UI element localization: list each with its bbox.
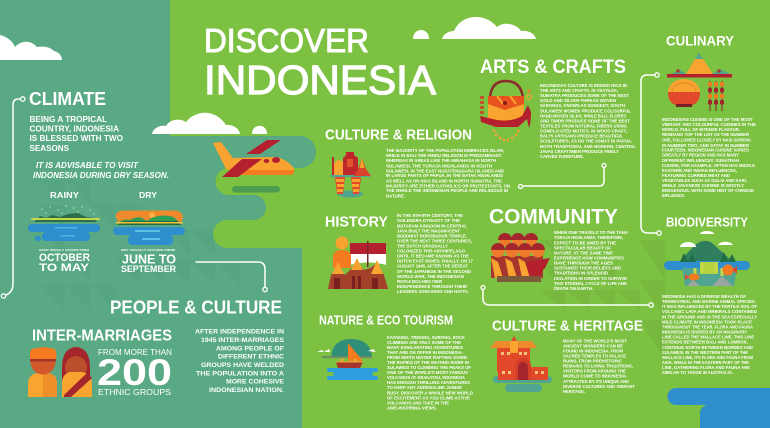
text: heritage body: FOUND IN INDONESIA. FROM xyxy=(563,348,623,354)
icon: couple xyxy=(28,347,92,397)
text: arts body: THE ARTS AND CRAFTS. IN TEXTILES, xyxy=(540,88,619,94)
text: arts body: JAVAS CRAFTSMEN PRODUCE FINELY xyxy=(540,149,620,155)
text: history body: SAILENDRA DYNASTY OF THE xyxy=(397,218,461,224)
text: culture and religion body: THE WHOLE THE INDONESIAN PEOPLE ARE RELIGIOUS IN xyxy=(386,188,508,194)
text: heritage body: SACRED TEMPLES TO PALACE xyxy=(563,354,627,360)
connector: arts to community xyxy=(518,164,606,188)
text: people and culture body: 1945 INTER-MARRIAGES xyxy=(201,337,285,344)
text: culture and religion body: WHILE IN BALI THE HINDU RELIGION IS PREDOMINANT. xyxy=(386,153,502,159)
text: arts body: TEXTILES FROM NATURAL FIBERS USING xyxy=(540,124,627,130)
text: heritage body xyxy=(563,338,635,395)
text: heritage body: REMAINS TO LIVING TRADITIONS, xyxy=(563,364,634,370)
shape: blue water corner xyxy=(668,388,770,428)
icon: dry landscape xyxy=(113,210,185,245)
cloud: top centre xyxy=(413,17,536,39)
icon: bag and shoe xyxy=(480,81,532,141)
icon: boat xyxy=(317,339,378,380)
text: culinary body: VIBRANT AND COLOURFUL CUISINES IN THE xyxy=(662,122,757,128)
text: biodiversity body: INDONESIA IS DIVIDED BY AN IMAGINARY xyxy=(662,330,748,336)
text: heritage body: HERITAGE. xyxy=(563,389,585,395)
text: climate intro: COUNTRY, INDONESIA xyxy=(30,124,119,134)
text: heritage body: MANY OF THE WORLD'S MOST xyxy=(563,338,627,344)
text: history body: COLONIZED THIS ARCHIPELAGO xyxy=(397,248,465,254)
text: biodiversity body: EXTENDS BETWEEN BALI AND LOMBOK, xyxy=(662,340,749,346)
text: nature body: SULAWESI TO CLIMBING THE PEAKS OF xyxy=(387,365,471,371)
text: biodiversity body: LINE CALLED THE WALLACE LINE. THIS LINE xyxy=(662,334,755,340)
text: arts body: GOLD AND SILVER-THREAD WOVEN xyxy=(540,98,616,104)
text: history body: JAVA BUILT THE MAGNIFICENT xyxy=(397,228,460,234)
text: nature body: MANY EXHILARATING ADVENTURES xyxy=(387,345,464,351)
heading: community: COMMUNITY xyxy=(489,206,618,228)
text: biodiversity body: VOLCANIC LAVA AND MINERALS CONTAINED xyxy=(662,309,757,315)
text: nature body: HAS ENOUGH THRILLING ADVENTURES xyxy=(387,380,471,386)
text: history body: IN THE 8TH-9TH CENTURY, THE xyxy=(397,213,464,219)
heading: culture and heritage: CULTURE & HERITAGE xyxy=(492,318,643,334)
text: heritage body: ANCIENT WONDERS CAN BE xyxy=(563,344,624,350)
text: community body: EXPECT TO BE AWED BY THE xyxy=(554,240,617,246)
heading: culture and religion: CULTURE & RELIGION xyxy=(325,126,472,144)
text: nature body: TO KEEP ANY ADRENALINE JUNKIE xyxy=(387,385,463,391)
text: culture and religion body: WHEREAS IN AREAS LIKE THE MINAHASA IN NORTH xyxy=(386,158,496,164)
text: arts body: SARONGS, KNOWN AS SONGKET; SOUTH xyxy=(540,103,625,109)
text: culinary body: INDIGENOUS, WITH SOME HINT OF CHINESE xyxy=(662,188,755,194)
background: green panel xyxy=(170,0,770,428)
text: culture and religion body: IN LARGE PARTS OF PAPUA, IN THE BATAK HIGHLANDS xyxy=(386,173,504,179)
text: rainy dates: RAINY USUALLY OCCURS FROM xyxy=(39,248,90,252)
text: people and culture body: THE POPULATION INTO A xyxy=(196,370,284,378)
text: culinary body xyxy=(662,117,757,199)
text: community body: EXPERIENCE HOW COMMUNITIES xyxy=(554,256,625,262)
text: culture and religion body: MAJORITY ARE EITHER CATHOLICS OR PROTESTANTS, ON xyxy=(386,184,510,190)
icon: community people xyxy=(491,233,550,282)
text: community body: NATURE. AT THE SAME TIME xyxy=(554,250,614,256)
text: nature body: OF EXCITEMENT AS YOU CLIMB ACTIVE xyxy=(387,396,471,402)
title xyxy=(204,22,437,103)
text: biodiversity body: SULAWESI. IN THE WESTERN PART OF THE xyxy=(662,350,749,356)
text: climate advice: INDONESIA DURING DRY SEASON. xyxy=(33,171,169,180)
text: arts body: CARVED FURNITURE. xyxy=(540,154,584,160)
heading: inter-marriages: INTER-MARRIAGES xyxy=(32,328,172,344)
text: rainy dates: TO MAY xyxy=(39,262,90,274)
text: climate intro: BEING A TROPICAL xyxy=(30,115,107,124)
text: history body xyxy=(397,213,473,295)
text: history body: OF THE JAPANESE IN THE SECOND xyxy=(397,269,471,275)
text: culture and religion body: SULAWESI, THE TORAJA HIGHLANDS IN SOUTH xyxy=(386,164,493,170)
text: arts body: AND TIMOR PRODUCE SOME OF THE BEST xyxy=(540,118,630,124)
text: biodiversity body xyxy=(662,294,758,376)
text: nature body: AWE-INSPIRING VIEWS. xyxy=(387,406,437,412)
text: heritage body: RUINS, FROM PREHISTORIC xyxy=(563,358,622,364)
text: rainy dates xyxy=(39,248,90,274)
text: biodiversity body: CONTINUE NORTH BETWEEN BORNEO AND xyxy=(662,345,753,351)
text: community body: DEATH ON EARTH. xyxy=(554,286,593,292)
text: culinary body: IN NUMBER TWO, AND SATAY IN NUMBER xyxy=(662,143,749,149)
text: biodiversity body: WALLACE LINE, ITS FLORA AND FAUNA FROM xyxy=(662,355,753,361)
text: nature body: THAT ARE ON OFFER IN INDONESIA. xyxy=(387,350,463,356)
text: history body: AUGUST 1945, AFTER THE DEFEAT xyxy=(397,264,468,270)
title: INDONESIA xyxy=(204,57,437,103)
text: climate advice xyxy=(33,161,169,180)
text: culture and religion body: SULAWESI, IN THE EAST NUSATENGGARA ISLANDS AND xyxy=(386,168,504,174)
text: arts body: HAND-WOVEN SILKS; WHILE BALI, FLORES xyxy=(540,114,627,120)
text: history body: DUTCH EAST INDIES. FINALLY, ON 17 xyxy=(397,258,473,264)
text: history body: THE DUTCH GRADUALLY xyxy=(397,244,449,250)
text: biodiversity body: TERRESTRIAL AND MARINE ANIMAL SPECIES. xyxy=(662,299,756,305)
text: people and culture body: AMONG PEOPLE OF xyxy=(216,346,284,352)
heading: culinary: CULINARY xyxy=(666,32,735,48)
text: biodiversity body: THROUGHOUT THE YEAR. FLORA AND FAUNA xyxy=(662,324,753,330)
text: dry dates xyxy=(121,248,176,275)
text: nature body: ONE OF THE WORLD'S MOST FAMOUS xyxy=(387,370,469,376)
text: culinary body: CUISINE, FOR EXAMPLE, OFTEN HAS MIDDLE xyxy=(662,163,756,169)
text: heritage body: DIVERSE CULTURES AND VIBRANT xyxy=(563,384,635,390)
text: culinary body: WHILE JAVANESE CUISINE IS MOSTLY xyxy=(662,183,745,189)
text: dry dates: SEPTEMBER xyxy=(121,264,176,275)
text: nature body xyxy=(387,335,473,412)
heading: people and culture: PEOPLE & CULTURE xyxy=(110,298,282,318)
text: community body: SPECTACULAR BEAUTY OF xyxy=(554,246,611,252)
text: culinary body: FEATURING CURRIED MEAT AND xyxy=(662,173,730,179)
cloud: above plane xyxy=(152,113,267,134)
icon: rainy landscape xyxy=(28,205,100,241)
stat: 200 ethnic groups xyxy=(97,348,172,397)
text: culinary body: VEGETABLES SUCH AS GULAI AND KARI, xyxy=(662,178,748,184)
text: people and culture body: AFTER INDEPENDENCE IN xyxy=(195,328,284,336)
text: culinary body: EASTERN AND INDIAN INFLUENCES, xyxy=(662,168,738,174)
text: culture and religion body: NATURE. xyxy=(386,194,405,200)
text: heritage body: ATTRACTED BY ITS UNIQUE AND xyxy=(563,379,629,385)
text: culture and religion body xyxy=(386,148,510,200)
text: culinary body: INDONESIAN CUISINE IS ONE OF THE MOST xyxy=(662,117,753,123)
heading: history: HISTORY xyxy=(325,214,388,230)
icon: biodiversity island xyxy=(664,231,750,286)
heading: arts and crafts: ARTS & CRAFTS xyxy=(480,56,626,78)
heading: biodiversity: BIODIVERSITY xyxy=(666,216,749,230)
icon: history flag and temples xyxy=(328,236,388,289)
text: nature body: FROM WHITE WATER RAFTING DOWN xyxy=(387,355,467,361)
text: biodiversity body: IT WAS INFLUENCED BY THE FERTILE SOIL OF xyxy=(662,304,757,310)
text: history body: BUDDHIST BOROBUDUR TEMPLE. xyxy=(397,234,467,240)
text: rainy dates: OCTOBER xyxy=(39,252,90,264)
text: climate advice: IT IS ADVISABLE TO VISIT xyxy=(36,161,139,170)
text: culinary body: FOURTEEN. INDONESIAN CUISINE VARIES xyxy=(662,148,750,154)
cloud: top left xyxy=(0,35,62,60)
heading: nature and eco tourism: NATURE & ECO TOURISM xyxy=(319,313,453,328)
icon: airplane xyxy=(213,140,294,192)
text: dry dates: JUNE TO xyxy=(122,252,176,266)
heading: climate: CLIMATE xyxy=(29,89,106,109)
text: nature body: VOLCANOS AT KRAKATAU, INDONESIA xyxy=(387,375,465,381)
text: arts body: SUMATRA PRODUCES SOME OF THE BEST xyxy=(540,93,629,99)
text: people and culture body: DIFFERENT ETHNIC xyxy=(218,354,284,360)
text: arts body: COMPLICATED MOTIFS. IN WOOD CRAFT, xyxy=(540,128,628,134)
connector: climate xyxy=(1,97,25,298)
text: culture and religion body: AS WELL AS ON NIAS ISLAND IN NORTH SUMATRA, THE xyxy=(386,178,503,184)
text: climate intro xyxy=(30,115,124,153)
text: biodiversity body: LINE, GATHERING FLORA AND FAUNA ARE xyxy=(662,365,751,371)
icon: temples xyxy=(331,152,371,198)
text: people and culture body: MORE COHESIVE xyxy=(226,378,285,386)
text: culinary body: INFLUENCE. xyxy=(662,193,685,199)
text: people and culture body: INDONESIAN NATION. xyxy=(209,387,284,394)
stat: 200 ethnic groups: 200 xyxy=(97,352,172,393)
text: people and culture body: GROUPS HAVE WELDED xyxy=(201,362,284,369)
text: biodiversity body: ASIA, WHILE IN THE EASTERN PART OF THE xyxy=(662,360,750,366)
text: nature body: KAYAKING, TREKING, SURFING, ROCK xyxy=(387,335,465,341)
icon: heritage building xyxy=(490,336,552,392)
connector: people and culture xyxy=(196,262,267,292)
text: climate intro: IS BLESSED WITH TWO xyxy=(30,134,124,143)
text: arts body: SULAWESI WOMEN PRODUCE COLOURFUL xyxy=(540,108,631,114)
title: DISCOVER xyxy=(204,22,369,59)
text: heritage body: VISITORS FROM AROUND THE xyxy=(563,368,627,374)
text: nature body: THE RAPIDS OF THE MAITING RIVER IN xyxy=(387,360,469,366)
text: culinary body: ONE, FOLLOWED CLOSELY BY NASI GORENG xyxy=(662,138,751,144)
text: arts body: BOTH TRADITIONAL AND MODERN, CENTRAL xyxy=(540,144,636,150)
text: biodiversity body: INDONESIA HAS A DIVERSE WEALTH OF xyxy=(662,294,746,300)
text: heritage body: WORLD COME TO INDONESIA. xyxy=(563,374,627,380)
text: community body: ISOLATION IN ORDER TO SURVIVE xyxy=(554,276,628,282)
text: culinary body: WORLD, FULL OF INTENSE FLAVOUR. xyxy=(662,127,740,133)
text: community body: HAVE THROUGH THE AGES xyxy=(554,260,614,266)
connector: culinary to biodiversity xyxy=(641,73,661,235)
text: history body: LEADERS SOEKARNO AND HATTA. xyxy=(397,289,469,295)
text: culture and religion body: THE MAJORITY OF THE POPULATION EMBRACES ISLAM, xyxy=(386,148,505,154)
text: history body: WORLD WAR, THE INDONESIAN xyxy=(397,274,464,280)
text: people and culture body xyxy=(195,328,285,394)
text: history body: MATARAM KINGDOM IN CENTRAL xyxy=(397,223,467,229)
text: history body: UNTIL IT BECAME KNOWN AS THE xyxy=(397,254,470,260)
text: arts body: SCULPTURES, AS DO THE ASMAT IN PAPUA. xyxy=(540,138,632,144)
text: nature body: CLIMBING ARE ONLY SOME OF THE xyxy=(387,340,462,346)
text: history body: OVER THE NEXT THREE CENTURIES, xyxy=(397,238,473,244)
text: community body xyxy=(554,230,628,292)
text: climate intro: SEASONS xyxy=(30,144,70,153)
text: dry dates: DRY USUALLY OCCURS FROM xyxy=(121,248,176,252)
text: arts body xyxy=(540,83,636,160)
text: history body: INDEPENDENCE THROUGH THEIR xyxy=(397,284,467,290)
text: culinary body: RENDANG TOP THE LIST AS THE NUMBER xyxy=(662,132,749,138)
text: culinary body: DIFFERENT INFLUENCES: SUMATRAN xyxy=(662,158,739,164)
text: community body: SUSTAINED THEIR BELIEFS AND xyxy=(554,266,621,272)
text: arts body: INDONESIAS CULTURE IS INDEED RICH IN xyxy=(540,83,627,89)
text: arts body: BALI'S ARTISANS PRODUCE BEAUTIFUL xyxy=(540,134,623,140)
text: biodiversity body: SIMILAR TO THOSE IN AUSTRALIA. xyxy=(662,370,733,376)
text: community body: TORAJA HIGHLANDS, THEREFORE, xyxy=(554,235,624,241)
text: biodiversity body: IN THE GROUND AND IN THE SEA ESPECIALLY xyxy=(662,314,758,320)
text: nature body: VOLCANOS AND TAKE IN THE xyxy=(387,400,450,406)
icon: food xyxy=(667,53,732,111)
text: community body: WHEN ONE TRAVELS TO THE TANA xyxy=(554,230,628,236)
text: nature body: BUSY. DISCOVER A WHOLE NEW WORLD xyxy=(387,390,473,396)
text: culinary body: GREATLY BY REGION AND HAS MANY xyxy=(662,152,740,158)
text: community body: THIS ETERNAL CYCLE OF LIFE AND xyxy=(554,281,627,287)
stat: 200 ethnic groups: FROM MORE THAN xyxy=(98,348,172,357)
label: rainy: RAINY xyxy=(50,190,79,200)
label: dry: DRY xyxy=(139,190,157,200)
text: biodiversity body: MILD CLIMATE IN INDONESIA TOOK PLACE xyxy=(662,320,753,326)
text: history body: PEOPLE DECLARED THEIR xyxy=(397,279,442,285)
stat: 200 ethnic groups: ETHNIC GROUPS xyxy=(98,388,171,397)
text: community body: TRADITIONS IN SPLENDID xyxy=(554,270,608,276)
connector: community to biodiversity xyxy=(481,286,653,307)
